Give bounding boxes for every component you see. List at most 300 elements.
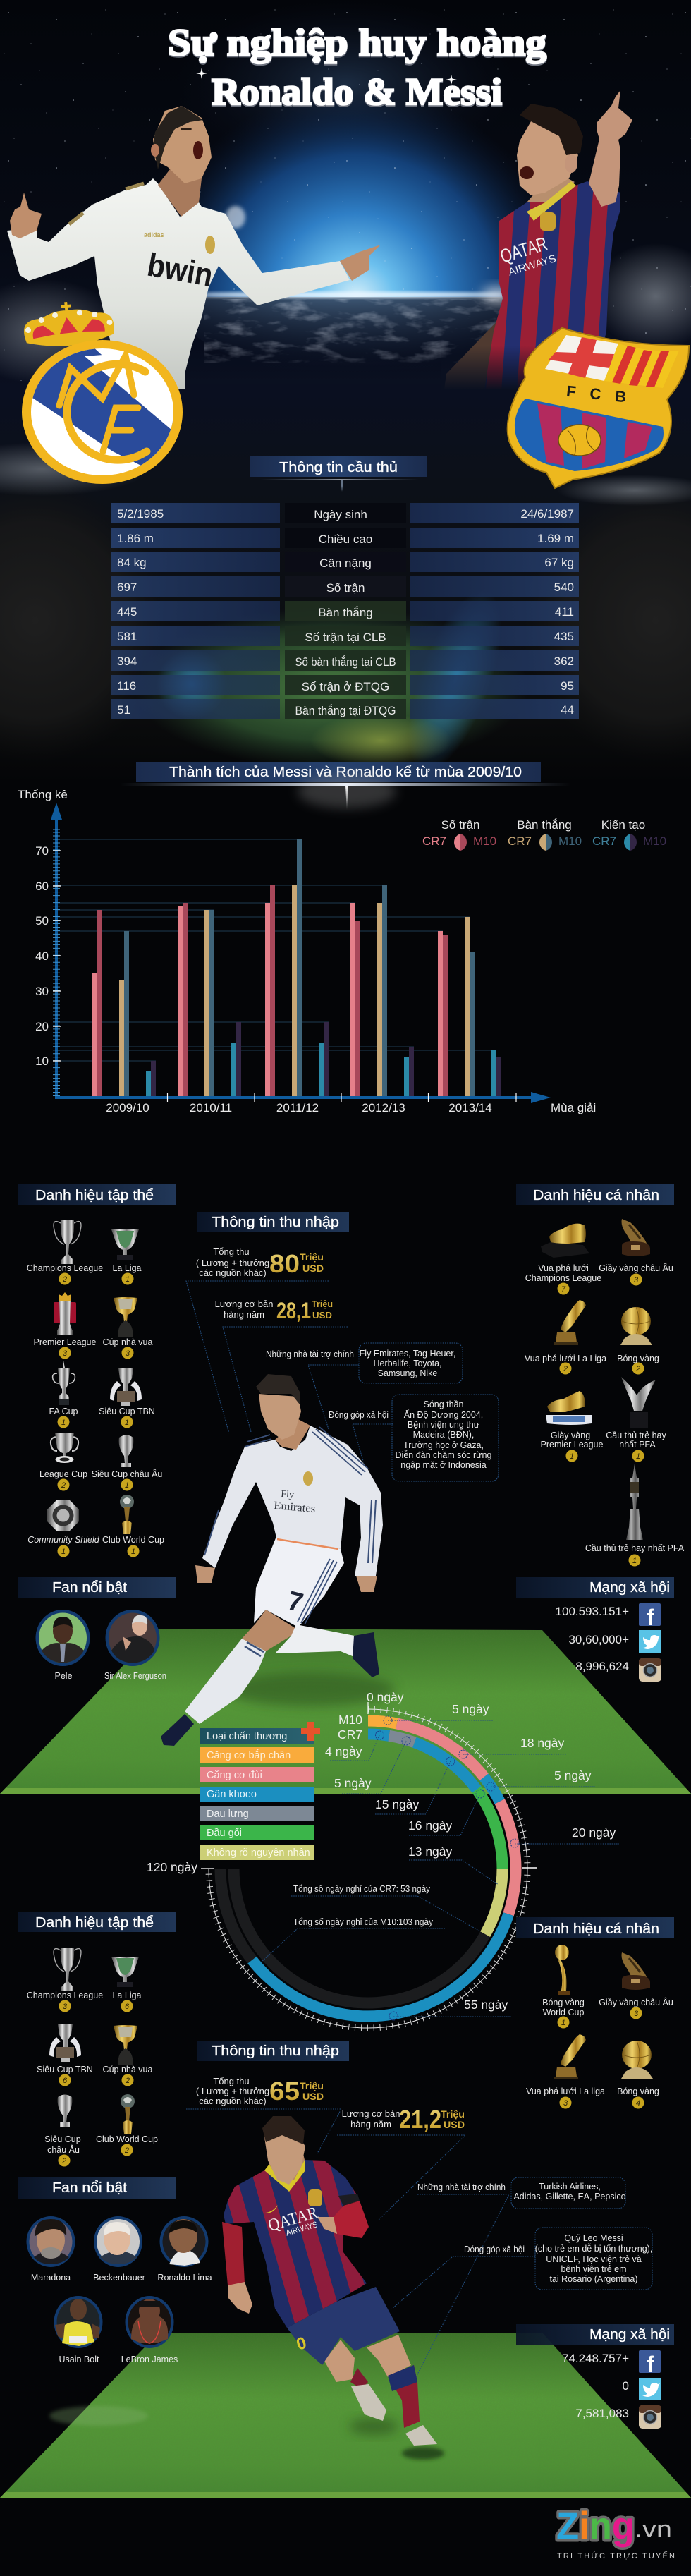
row: height: 1.69 m [537,532,574,545]
social: Messi Facebook: f [647,2352,654,2377]
icon: red cross [301,1722,320,1741]
trophy: Giay vang Premier League: Giày vàng [551,1430,590,1440]
callout: Ronaldo sponsors: Fly Emirates, Tag Heuer, [360,1349,455,1359]
trophy: Sieu Cup TBN: 1 [125,1418,129,1427]
trophy: Bong vang [617,1307,659,1374]
trophy: Messi Sieu Cup chau Au [44,2095,81,2167]
heading: player info: Thông tin cầu thủ [279,460,398,475]
x axis: 2009/10 [106,1101,149,1114]
income: Ronaldo base salary: Triệu [312,1299,333,1309]
trophy: Club World Cup: 1 [131,1548,135,1556]
bars: 2011/12 [265,839,329,1096]
trophy: Club World Cup [102,1495,164,1557]
y axis: 50 [35,914,49,928]
social: Ronaldo Instagram [575,1658,661,1682]
logo: Zing.vn: TRI THỨC TRỰC TUYẾN [557,2551,675,2560]
trophy: Champions League: 2 [62,1275,67,1284]
player: Ronaldo running [161,1374,383,1746]
player: Ronaldo running: 7 [284,1586,306,1618]
row: appearances [111,576,579,597]
trophy: League Cup: League Cup [39,1469,87,1479]
trophy: Vua pha luoi Champions League: Champions League [525,1273,601,1283]
ring labels: Tổng số ngày nghỉ của M10:103 ngày [293,1916,433,1927]
trophy: Champions League: Champions League [27,1263,103,1273]
row: birth date: Ngày sinh [314,508,367,521]
trophy: FA Cup: 1 [61,1418,66,1427]
trophy: Messi Cup nha vua: Cúp nhà vua [103,2065,152,2074]
trophy: Messi Sieu Cup chau Au: châu Âu [47,2144,80,2155]
trophy: Messi Champions League: Champions League [27,1991,103,2000]
ring labels: 20 ngày [572,1825,616,1840]
heading: Ronaldo personal titles: Danh hiệu cá nhân [533,1188,659,1203]
trophy: Messi Giay vang chau Au: Giầy vàng châu Âu [599,1997,673,2007]
ring: unused days track [220,1869,485,2003]
income: Ronaldo base salary: Lương cơ bản [215,1299,273,1309]
chart legend: M10 [473,834,496,848]
callout: Messi social contribution: Quỹ Leo Messi [564,2233,623,2243]
trophy: Vua pha luoi La Liga: Vua phá lưới La Liga [525,1354,606,1363]
y axis: 20 [35,1020,49,1033]
ring labels: 15 ngày [375,1797,420,1811]
ring labels: CR7 [338,1727,362,1742]
income: Ronaldo total: 80 [269,1249,300,1278]
row: club goals: 394 [117,655,137,668]
trophy: Cau thu hay nhat PFA: Cầu thủ trẻ hay nhất PFA [585,1543,685,1553]
trophy: Cau thu tre hay nhat PFA [606,1377,666,1462]
income: Ronaldo total: USD [302,1263,324,1274]
income: Messi base salary: hàng năm [350,2119,391,2130]
social: Messi Instagram: 7,581,083 [575,2407,629,2420]
trophy: Sieu Cup chau Au: Siêu Cup châu Âu [92,1469,162,1479]
ring labels: M10 [338,1713,362,1727]
trophy: La Liga: La Liga [112,1263,142,1273]
heading: Messi personal titles: Danh hiệu cá nhân [533,1921,659,1937]
income: Ronaldo base salary [215,1298,348,1432]
x axis [55,1092,596,1114]
trophy: Messi Sieu Cup TBN: 6 [63,2077,68,2085]
heading: Ronaldo team titles: Danh hiệu tập thể [35,1188,154,1203]
ring labels: 4 ngày [325,1744,362,1758]
ring labels: 120 ngày [147,1860,197,1874]
income: Messi total: Triệu [300,2080,324,2091]
heading: Messi fans: Fan nổi bật [52,2180,127,2196]
trophy: Messi La Liga: La Liga [112,1991,142,2000]
ring labels: 18 ngày [520,1736,565,1750]
row: birth date [111,503,579,523]
trophy: Messi Cup nha vua: 2 [125,2077,130,2085]
y axis [18,788,68,1098]
heading: Ronaldo fans: Fan nổi bật [52,1580,127,1596]
stadium lights and blurred pitch [0,243,691,782]
trophy: Messi Bong vang [617,2041,659,2109]
trophy: Messi Cup nha vua [103,2025,152,2086]
income: Messi total: USD [302,2091,324,2102]
trophy: Champions League [27,1220,103,1285]
income: Messi total: Tổng thu [213,2076,250,2086]
callout: Ronaldo sponsors: Những nhà tài trợ chính [266,1349,354,1359]
trophy: Bong vang: 2 [635,1365,640,1373]
chart legend: CR7 [508,834,532,848]
callout: Ronaldo social contribution: Diễn đàn chăm sóc rừng [396,1450,491,1460]
income: Ronaldo base salary: 28,1 [276,1298,311,1323]
trophy: Sieu Cup chau Au [92,1435,162,1491]
title: Ronaldo & Messi [212,71,502,113]
heading: achievements since 2009/10 [120,762,571,811]
fan: LeBron James: LeBron James [121,2355,178,2364]
ring labels: 0 ngày [367,1690,404,1704]
callout: Messi sponsors [416,2177,626,2377]
callout: Messi social contribution: Đóng góp xã hội [464,2244,525,2254]
trophy: Vua pha luoi La Liga: 2 [563,1365,568,1373]
bars: 2010/11 [178,903,241,1096]
y axis: 30 [35,985,49,998]
income: Messi base salary [337,2105,465,2220]
trophy: Messi Bong vang: 4 [636,2099,640,2108]
social: Ronaldo Facebook: 100.593.151+ [556,1605,629,1618]
player: Ronaldo hero: adidas [144,231,164,238]
trophy: Messi Champions League: 3 [63,2003,68,2011]
social: Messi Facebook [562,2350,661,2377]
x axis: 2010/11 [190,1101,232,1114]
callout: Ronaldo social contribution: Sóng thần [423,1399,464,1409]
fan: Beckenbauer: Beckenbauer [93,2273,145,2283]
callout: Ronaldo social contribution: ngập mặt ở Indonesia [400,1460,487,1470]
social: Messi Facebook: 74.248.757+ [562,2352,629,2365]
heading: Ronaldo personal titles [516,1184,674,1205]
income: Ronaldo total: các nguồn khác) [199,1268,267,1278]
income: Messi base salary: USD [444,2119,465,2130]
trophy: Sieu Cup TBN: Siêu Cup TBN [99,1407,155,1416]
income: Ronaldo total: ( Lương + thưởng [196,1258,269,1268]
row: goals: Bàn thắng [318,606,373,619]
callout: Messi sponsors: Adidas, Gillette, EA, Pepsico [513,2192,626,2201]
trophy: Messi Giay vang chau Au [599,1952,673,2019]
trophy: Cau thu tre hay nhat PFA: 1 [636,1452,640,1461]
trophy: Community Shield: Community Shield [27,1535,100,1545]
ring labels [147,1690,619,2020]
player: Ronaldo running: Emirates [274,1500,316,1515]
trophy: Messi Club World Cup: 2 [124,2146,129,2155]
trophy: FA Cup: FA Cup [49,1407,78,1416]
trophy: Sieu Cup TBN [99,1368,155,1428]
logo: FC Barcelona crest: FCB [565,382,627,406]
social: Messi Instagram [575,2405,661,2429]
player: Messi running [222,2116,437,2446]
y axis: 70 [35,844,49,858]
fan: Sir Alex Ferguson: Sir Alex Ferguson [104,1671,166,1681]
ring labels: 5 ngày [452,1702,489,1716]
ring labels: 55 ngày [464,1998,508,2012]
pitch: Messi [0,2333,691,2498]
fan: LeBron James [121,2296,178,2364]
trophy: Giay vang Premier League [541,1391,604,1462]
x axis: Mùa giải [551,1101,596,1114]
x axis: 2012/13 [362,1101,405,1114]
trophy: Messi Club World Cup [96,2094,158,2156]
ring labels: 5 ngày [554,1768,592,1782]
trophy: Bong vang World Cup: Bóng vàng [542,1998,585,2007]
row: national team goals: 51 [117,703,130,717]
trophy: Messi Vua pha luoi La Liga: Vua phá lưới La liga [526,2086,605,2096]
trophy: Cup nha vua: 3 [126,1349,130,1358]
chart: stats by season [18,788,666,1114]
bars: 2012/13 [350,885,414,1096]
trophy: Messi Sieu Cup chau Au: Siêu Cup [44,2134,81,2144]
heading: Messi fans [18,2177,176,2199]
fan: Sir Alex Ferguson [104,1610,166,1681]
heading: Ronaldo fans [18,1577,176,1598]
income: Ronaldo total [186,1246,329,1433]
chart legend: CR7 [422,834,446,848]
trophy: Vua pha luoi La Liga [525,1300,606,1374]
row: club goals [111,650,579,671]
trophy: Vua pha luoi Champions League: Vua phá lưới [538,1263,589,1273]
row: national team appearances: Số trận ở ĐTQG [302,680,389,693]
social: Messi Twitter: 0 [623,2379,629,2393]
row: height [111,528,579,548]
legend: injury types: Loại chấn thương [207,1731,287,1742]
fan: Usain Bolt [54,2296,103,2364]
trophy: Bong vang World Cup: World Cup [543,2007,584,2017]
callout: Ronaldo social contribution: Trường học ở Gaza, [403,1440,484,1450]
trophy: Club World Cup: Club World Cup [102,1535,164,1545]
row: club appearances [111,626,579,646]
trophy: Giay vang Premier League: 1 [570,1452,574,1461]
income: Messi total: ( Lương + thưởng [196,2086,269,2096]
row: goals: 445 [117,605,137,619]
heading: Messi income: Thông tin thu nhập [212,2043,339,2059]
fan: Ronaldo Lima [157,2216,212,2283]
callout: Messi social contribution [392,2228,652,2309]
callout: Messi social contribution: bệnh viện trẻ em [561,2264,627,2274]
social: Ronaldo Twitter: 30,60,000+ [568,1633,629,1646]
trophy: Community Shield: 1 [61,1548,66,1556]
trophy: Messi Giay vang chau Au: 3 [634,2010,639,2018]
row: national team appearances [111,675,579,695]
player: Messi running: 0 [294,2333,309,2355]
fan: Maradona: Maradona [31,2273,71,2283]
row: height: 1.86 m [117,532,154,545]
ring: CR7 injuries [368,1734,502,1934]
fan: Ronaldo Lima: Ronaldo Lima [157,2273,212,2283]
trophy: Messi La Liga [111,1957,142,2012]
callout: Ronaldo sponsors: Samsung, Nike [378,1368,437,1378]
chart legend: Bàn thắng [517,818,572,832]
row: appearances: 540 [554,581,574,594]
trophy: Messi Sieu Cup chau Au: 2 [61,2157,66,2165]
income: Messi total [186,2076,341,2153]
row: appearances: 697 [117,581,137,594]
legend: injury types: Không rõ nguyên nhân [207,1847,310,1859]
title [168,21,546,113]
fan: Maradona [27,2216,75,2283]
income: Ronaldo base salary: hàng năm [224,1309,264,1320]
trophy: Cup nha vua: Cúp nhà vua [103,1337,152,1347]
chart legend: M10 [558,834,582,848]
fan: Pele: Pele [54,1671,73,1681]
trophy: Messi Vua pha luoi La Liga: 3 [563,2099,568,2108]
player: Messi hero [441,90,632,390]
heading: Messi social networks [516,2324,674,2345]
heading: Messi team titles: Danh hiệu tập thể [35,1915,154,1931]
chart legend [422,818,666,851]
callout: Messi social contribution: tại Rosario (Argentina) [549,2274,638,2284]
legend: injury types: Căng cơ bắp chân [207,1749,291,1761]
y axis: 60 [35,880,49,893]
y axis: Thống kê [18,788,68,801]
trophy: Giay vang chau Au [599,1219,673,1285]
callout: Ronaldo sponsors: Herbalife, Toyota, [373,1359,442,1368]
income: Ronaldo base salary: USD [312,1310,332,1320]
logo: Real Madrid crest [21,297,183,487]
row: national team goals: Bàn thắng tại ĐTQG [295,704,396,717]
income: Messi base salary: Lương cơ bản [342,2108,400,2119]
heading: Ronaldo team titles [18,1184,176,1205]
heading: Messi income [197,2041,349,2061]
logo: Zing.vn: .vn [635,2516,672,2543]
ring labels: 5 ngày [334,1776,372,1790]
pitch: Ronaldo [0,1629,691,1794]
row: club goals: Số bàn thắng tại CLB [295,655,396,669]
bars: 2013/14 [438,917,501,1096]
y axis: 40 [35,949,49,963]
callout: Messi sponsors: Những nhà tài trợ chính [417,2182,506,2192]
trophy: Messi Champions League [27,1948,103,2012]
title: Sự nghiệp huy hoàng [168,21,546,63]
trophy: Vua pha luoi Champions League: 7 [561,1285,566,1294]
player: Messi running: QATAR [266,2204,320,2235]
trophy: Cau thu hay nhat PFA [585,1464,685,1566]
ring: scale [201,1702,537,2028]
trophy: Giay vang chau Au: 3 [634,1276,639,1284]
callout: Ronaldo social contribution: Ấn Độ Dương 2004, [404,1409,483,1420]
row: club appearances: 581 [117,630,137,643]
heading: Ronaldo social networks [516,1577,674,1598]
chart legend: Kiến tạo [601,818,645,832]
row: club goals: 362 [554,655,574,668]
income: Messi total: 65 [269,2077,300,2106]
row: national team goals: 44 [561,703,574,717]
bars: 2009/10 [92,910,156,1096]
trophy: Messi Sieu Cup TBN: Siêu Cup TBN [37,2065,93,2074]
legend: injury types: Đầu gối [207,1828,242,1839]
trophy: Bong vang World Cup [542,1945,585,2029]
row: appearances: Số trận [326,581,365,595]
player: Messi hero: AIRWAYS [507,253,558,279]
trophy: Messi La Liga: 6 [125,2003,130,2011]
trophy: La Liga [111,1229,142,1285]
row: weight [111,552,579,572]
heading: achievements since 2009/10: Thành tích của Messi và Ronaldo kể từ mùa 2009/10 [169,765,522,780]
social: Ronaldo Facebook: f [647,1605,654,1630]
player: Messi hero: QATAR [498,233,550,267]
chart legend: M10 [643,834,666,848]
trophy: Cau thu tre hay nhat PFA: nhất PFA [619,1440,656,1450]
callout: Ronaldo sponsors [266,1343,463,1429]
income: Messi total: các nguồn khác) [199,2096,267,2106]
trophy: Cau thu tre hay nhat PFA: Cầu thủ trẻ hay [606,1430,666,1440]
logo: Zing.vn [556,2503,675,2560]
chart: injury days ring [147,1690,619,2028]
income: Messi base salary: 21,2 [399,2105,441,2134]
table: player comparison [111,503,579,719]
chart guide lines [56,839,496,1061]
player: Ronaldo running: Fly [281,1489,295,1501]
heading: Ronaldo social networks: Mạng xã hội [589,1580,670,1596]
row: weight: 84 kg [117,556,147,569]
row: birth date: 24/6/1987 [520,507,574,521]
player: Ronaldo hero [7,106,381,389]
social: Ronaldo Twitter [568,1630,661,1653]
trophy: Premier League [34,1292,97,1359]
trophy: Sieu Cup chau Au: 1 [125,1481,129,1490]
fan: Pele [35,1610,90,1681]
trophy: Cau thu hay nhat PFA: 1 [632,1557,637,1565]
trophy: Messi Bong vang: Bóng vàng [617,2086,659,2096]
trophy: Cup nha vua [103,1297,152,1359]
logo: Zing.vn: Zing [556,2503,635,2548]
row: birth date: 5/2/1985 [117,507,164,521]
trophy: Vua pha luoi Champions League [525,1224,601,1295]
ring: M10 injuries [252,1720,515,2016]
chart legend: CR7 [592,834,616,848]
row: goals [111,601,579,621]
fan: Beckenbauer [93,2216,145,2283]
logo: FC Barcelona crest [508,328,689,488]
callout: Ronaldo social contribution: Madeira (BĐN), [413,1430,474,1440]
row: national team appearances: 95 [561,679,574,693]
heading: Messi personal titles [516,1917,674,1938]
row: weight: 67 kg [544,556,574,569]
social: Ronaldo Instagram: 8,996,624 [575,1660,629,1673]
trophy: League Cup [39,1433,87,1491]
trophy: Giay vang chau Au: Giầy vàng châu Âu [599,1263,673,1273]
legend: injury types: Gân khoeo [207,1789,257,1800]
trophy: Bong vang: Bóng vàng [617,1354,659,1363]
row: goals: 411 [555,605,574,619]
row: national team goals [111,699,579,719]
trophy: Premier League: 3 [63,1349,68,1358]
x axis: 2011/12 [276,1101,319,1114]
income: Ronaldo total: Tổng thu [213,1246,250,1257]
trophy: Messi Sieu Cup TBN [37,2024,93,2086]
legend: injury types: Căng cơ đùi [207,1770,262,1781]
callout: Ronaldo social contribution: Đóng góp xã hội [329,1410,389,1420]
player: Messi running: AIRWAYS [285,2219,319,2238]
trophy: Bong vang World Cup: 1 [561,2019,565,2027]
legend: injury types: Đau lưng [207,1809,249,1820]
social: Messi Twitter [623,2378,661,2400]
trophy: FA Cup [49,1361,78,1428]
trophy: Premier League: Premier League [34,1337,97,1347]
trophy: Community Shield [27,1500,100,1557]
heading: Messi social networks: Mạng xã hội [589,2327,670,2343]
trophy: Messi Club World Cup: Club World Cup [96,2134,158,2144]
income: Ronaldo total: Triệu [300,1251,324,1263]
callout: Messi social contribution: (cho trẻ em dễ bị tổn thương), [535,2243,652,2254]
fan: Usain Bolt: Usain Bolt [59,2355,99,2364]
legend: injury types [200,1722,320,1860]
trophy: Messi Vua pha luoi La Liga [526,2034,605,2109]
heading: Ronaldo income: Thông tin thu nhập [212,1215,339,1230]
callout: Messi social contribution: UNICEF, Học viện trẻ và [546,2254,642,2264]
heading: Messi team titles [18,1912,176,1932]
player: Ronaldo hero: bwin [145,246,216,293]
heading: player info [250,456,427,492]
ring labels: 13 ngày [408,1845,453,1859]
row: club appearances: Số trận tại CLB [305,631,386,644]
heading: Ronaldo income [197,1212,349,1232]
